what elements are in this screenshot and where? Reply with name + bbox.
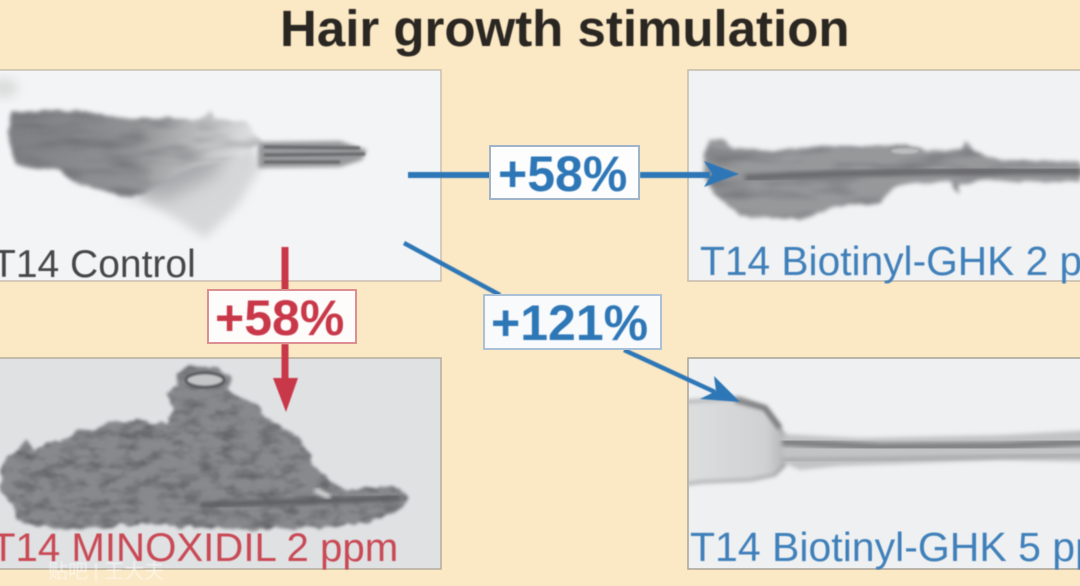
panel: T14 control [0, 70, 441, 286]
callout: +58% Biotinyl-GHK 2 ppm: +58% [498, 146, 627, 202]
arrow: control to Biotinyl-GHK 5 ppm [404, 243, 740, 402]
follicle: control [10, 110, 367, 238]
callout: +121% Biotinyl-GHK 5 ppm: +121% [491, 295, 648, 351]
callout: +58% Minoxidil: +58% [215, 290, 344, 346]
follicle: Biotinyl-GHK 5 ppm [680, 398, 1080, 485]
panel: T14 Biotinyl-GHK 2 ppm [688, 70, 1080, 284]
follicle: Minoxidil 2 ppm [0, 366, 408, 530]
follicle: Biotinyl-GHK 2 ppm [703, 139, 1080, 220]
watermark: 贴吧 | 王大夫 [48, 560, 164, 583]
panel: T14 Minoxidil 2 ppm [0, 358, 441, 570]
title: Hair growth stimulation [280, 0, 850, 57]
arrow: control to Minoxidil [273, 247, 298, 412]
panel: T14 Biotinyl-GHK 5 ppm [680, 358, 1080, 570]
label: T14 MINOXIDIL 2 ppm: T14 MINOXIDIL 2 ppm [0, 525, 398, 570]
arrow: control to Biotinyl-GHK 2 ppm [408, 161, 739, 187]
